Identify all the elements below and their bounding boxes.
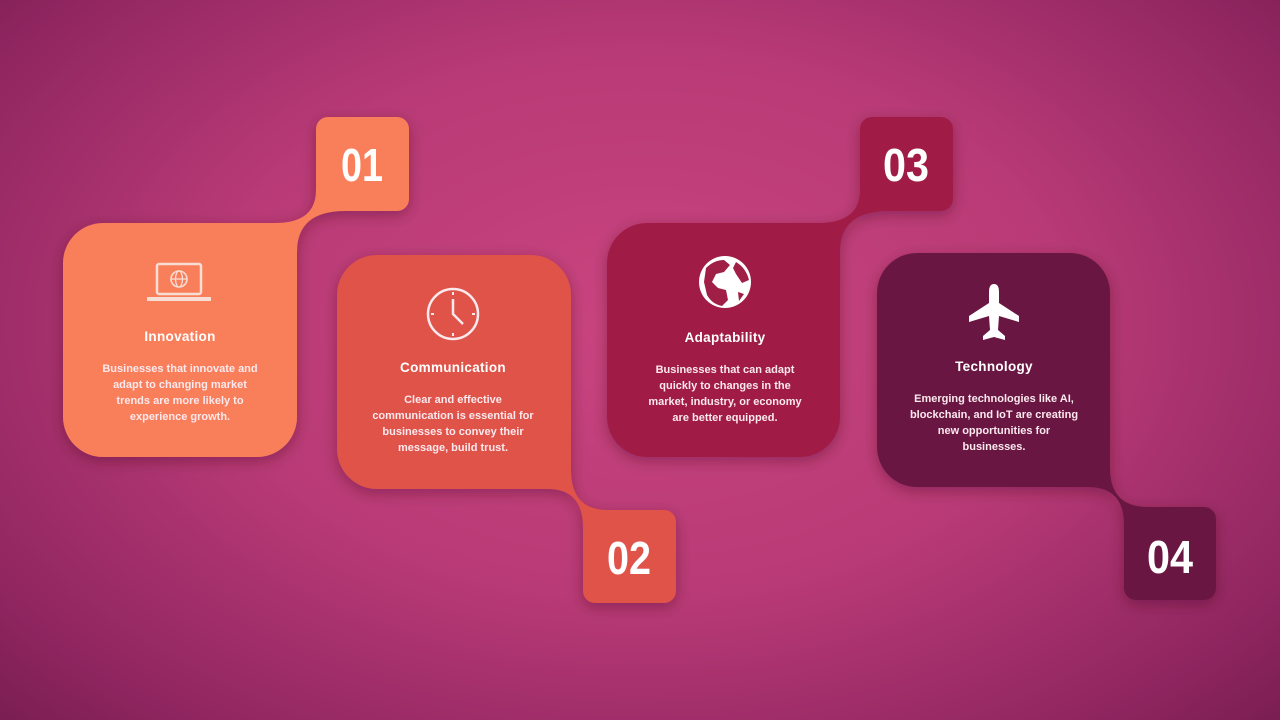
text: technology: blockchain, and IoT are creating xyxy=(910,409,1078,421)
text: adaptability: Businesses that can adapt xyxy=(656,364,794,376)
heading: communication: Communication xyxy=(400,360,506,375)
number 04: 04 xyxy=(1147,531,1193,583)
heading: technology: Technology xyxy=(955,359,1033,374)
text: adaptability: are better equipped. xyxy=(672,412,778,424)
text: innovation: Businesses that innovate and xyxy=(102,363,258,375)
heading: adaptability: Adaptability xyxy=(685,330,766,345)
icon: clock xyxy=(428,289,478,339)
number 01: 01 xyxy=(341,139,383,191)
text: communication: businesses to convey their xyxy=(382,426,524,438)
text: communication: message, build trust. xyxy=(398,442,508,454)
text: technology: Emerging technologies like AI, xyxy=(914,393,1074,405)
icon: laptop globe xyxy=(147,264,211,299)
text: communication: communication is essential for xyxy=(372,410,534,422)
number 03: 03 xyxy=(883,139,929,191)
text: innovation: trends are more likely to xyxy=(116,395,244,407)
panel: technology xyxy=(877,253,1216,600)
text: adaptability: market, industry, or economy xyxy=(648,396,802,408)
heading: innovation: Innovation xyxy=(144,329,216,344)
panel: communication xyxy=(337,255,676,603)
icon: airplane xyxy=(969,284,1019,340)
text: technology: new opportunities for xyxy=(938,425,1051,437)
icon: globe xyxy=(699,256,751,308)
text: technology: businesses. xyxy=(963,441,1025,453)
number 02: 02 xyxy=(607,532,651,584)
panel: innovation xyxy=(63,117,409,457)
panel: adaptability xyxy=(607,117,953,457)
text: innovation: experience growth. xyxy=(130,411,230,423)
text: innovation: adapt to changing market xyxy=(113,379,247,391)
text: communication: Clear and effective xyxy=(404,394,502,406)
text: adaptability: quickly to changes in the xyxy=(659,380,791,392)
